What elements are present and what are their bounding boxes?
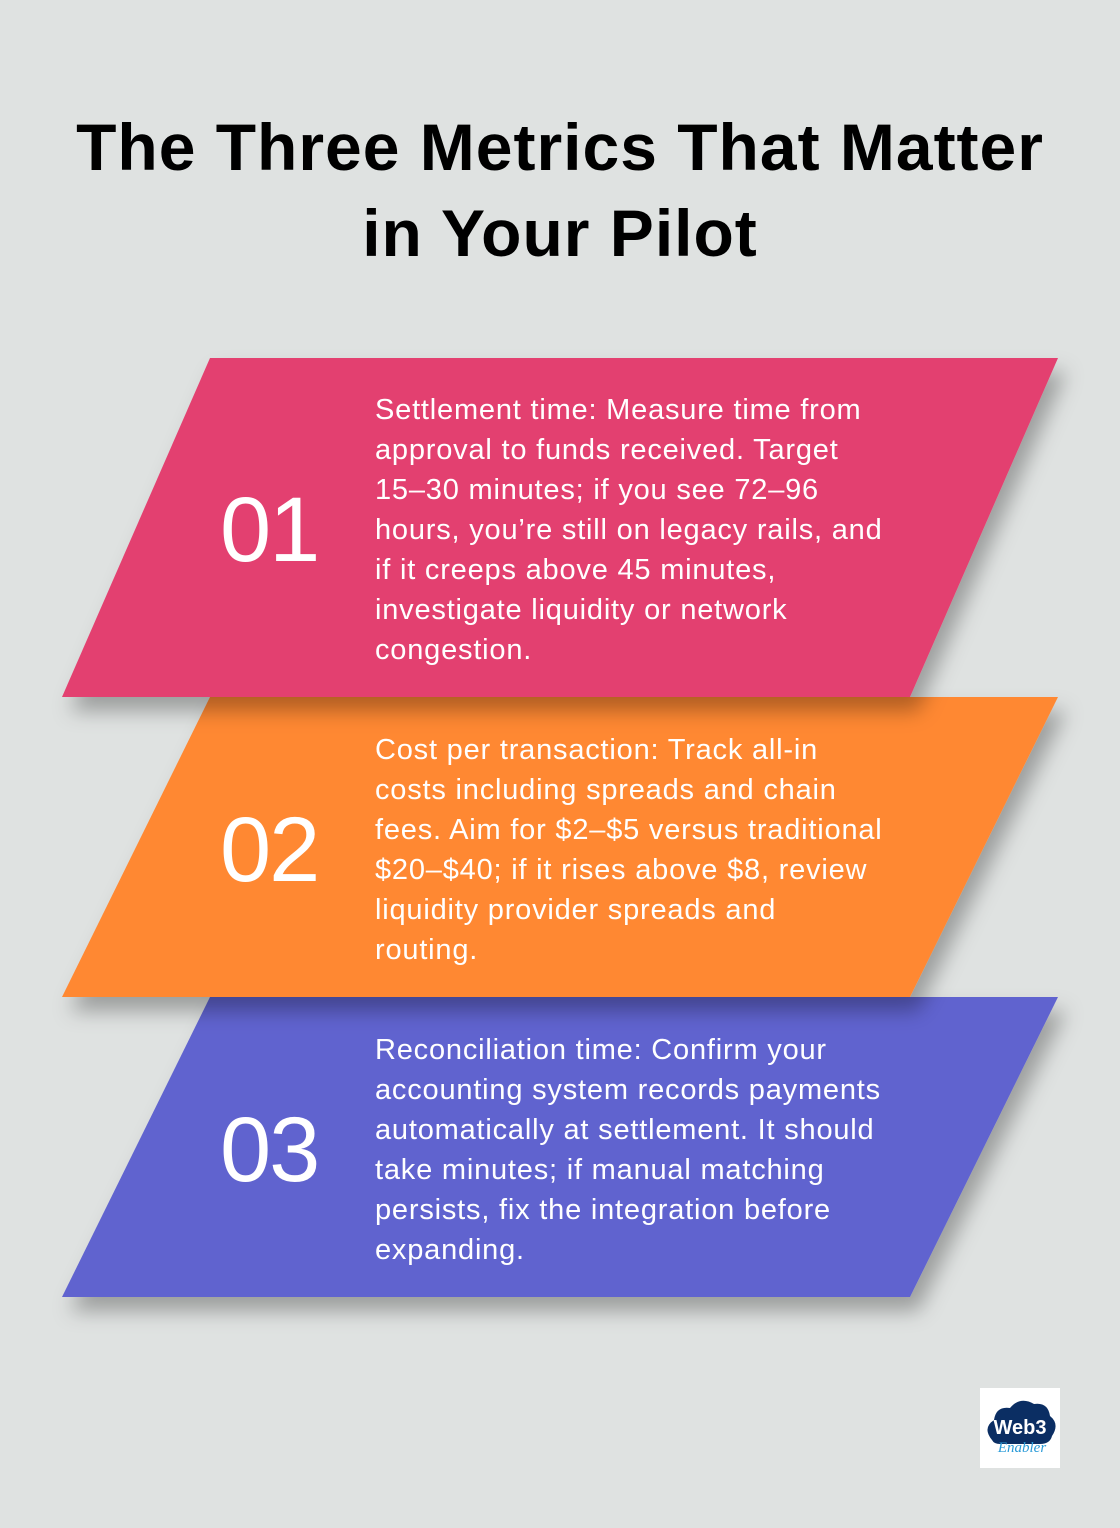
panel: 01 shape xyxy=(62,358,1058,697)
text 01: investigate liquidity or network xyxy=(375,594,787,626)
text 02: Cost per transaction: Track all-in xyxy=(375,734,818,766)
logo: Web3 xyxy=(994,1417,1046,1439)
text 02: $20–$40; if it rises above $8, review xyxy=(375,854,867,886)
text 02: liquidity provider spreads and xyxy=(375,894,776,926)
text 02: fees. Aim for $2–$5 versus traditional xyxy=(375,814,883,846)
text 03: persists, fix the integration before xyxy=(375,1194,831,1226)
text 03: take minutes; if manual matching xyxy=(375,1154,825,1186)
text 01: congestion. xyxy=(375,634,532,666)
text 03: expanding. xyxy=(375,1234,525,1266)
text 02 xyxy=(375,734,883,966)
panel: 02 shape xyxy=(62,697,1058,997)
number 03: 03 xyxy=(220,1099,318,1201)
text 01: hours, you’re still on legacy rails, and xyxy=(375,514,883,546)
text 02: routing. xyxy=(375,934,478,966)
text 03: accounting system records payments xyxy=(375,1074,881,1106)
logo: Enabler xyxy=(997,1440,1046,1456)
title: The Three Metrics That Matter xyxy=(76,110,1044,184)
text 03: automatically at settlement. It should xyxy=(375,1114,874,1146)
logo xyxy=(980,1388,1060,1468)
text 02: costs including spreads and chain xyxy=(375,774,837,806)
text 01 xyxy=(375,394,883,666)
text 01: if it creeps above 45 minutes, xyxy=(375,554,776,586)
title xyxy=(76,110,1044,270)
text 03: Reconciliation time: Confirm your xyxy=(375,1034,827,1066)
text 01: 15–30 minutes; if you see 72–96 xyxy=(375,474,819,506)
title: in Your Pilot xyxy=(362,196,758,270)
panel: 03 shape xyxy=(62,997,1058,1297)
text 01: Settlement time: Measure time from xyxy=(375,394,862,426)
text 01: approval to funds received. Target xyxy=(375,434,839,466)
text 03 xyxy=(375,1034,881,1266)
number 01: 01 xyxy=(220,479,318,581)
number 02: 02 xyxy=(220,799,318,901)
